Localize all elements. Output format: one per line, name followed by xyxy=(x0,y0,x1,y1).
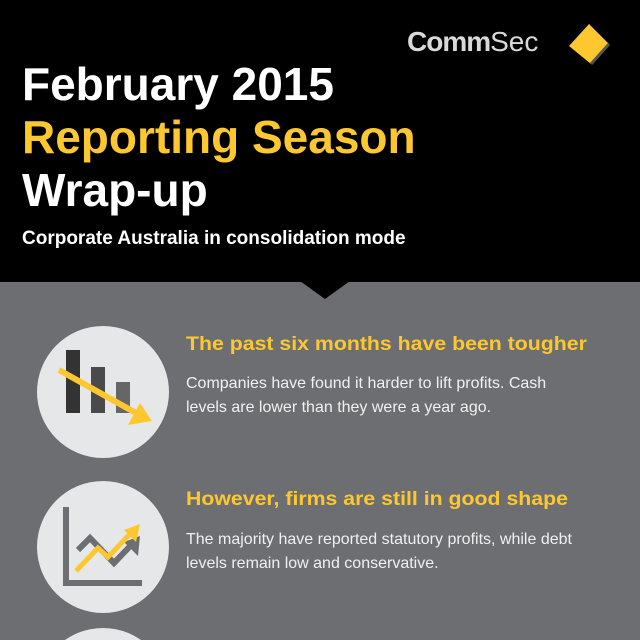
text 2: The majority have reported statutory profits, while debt levels remain low and conservative. xyxy=(186,531,572,572)
heading 2: However, firms are still in good shape xyxy=(186,489,568,510)
heading 1: The past six months have been tougher xyxy=(186,334,587,355)
title xyxy=(22,58,416,216)
icon: falling bars xyxy=(37,326,169,458)
header panel xyxy=(0,0,640,282)
title: February 2015 xyxy=(22,58,334,110)
logo: CommSec: CommSec xyxy=(407,26,538,57)
text 1: Companies have found it harder to lift profits. Cash levels are lower than they were a year ago. xyxy=(186,375,546,416)
icon: rising chart xyxy=(37,481,169,613)
icon: third circle xyxy=(65,628,141,640)
logo: CommSec xyxy=(407,24,610,65)
title: Reporting Season xyxy=(22,111,416,163)
subtitle: Corporate Australia in consolidation mode xyxy=(22,228,406,249)
notch arrow xyxy=(302,282,348,299)
title: Wrap-up xyxy=(22,164,208,216)
